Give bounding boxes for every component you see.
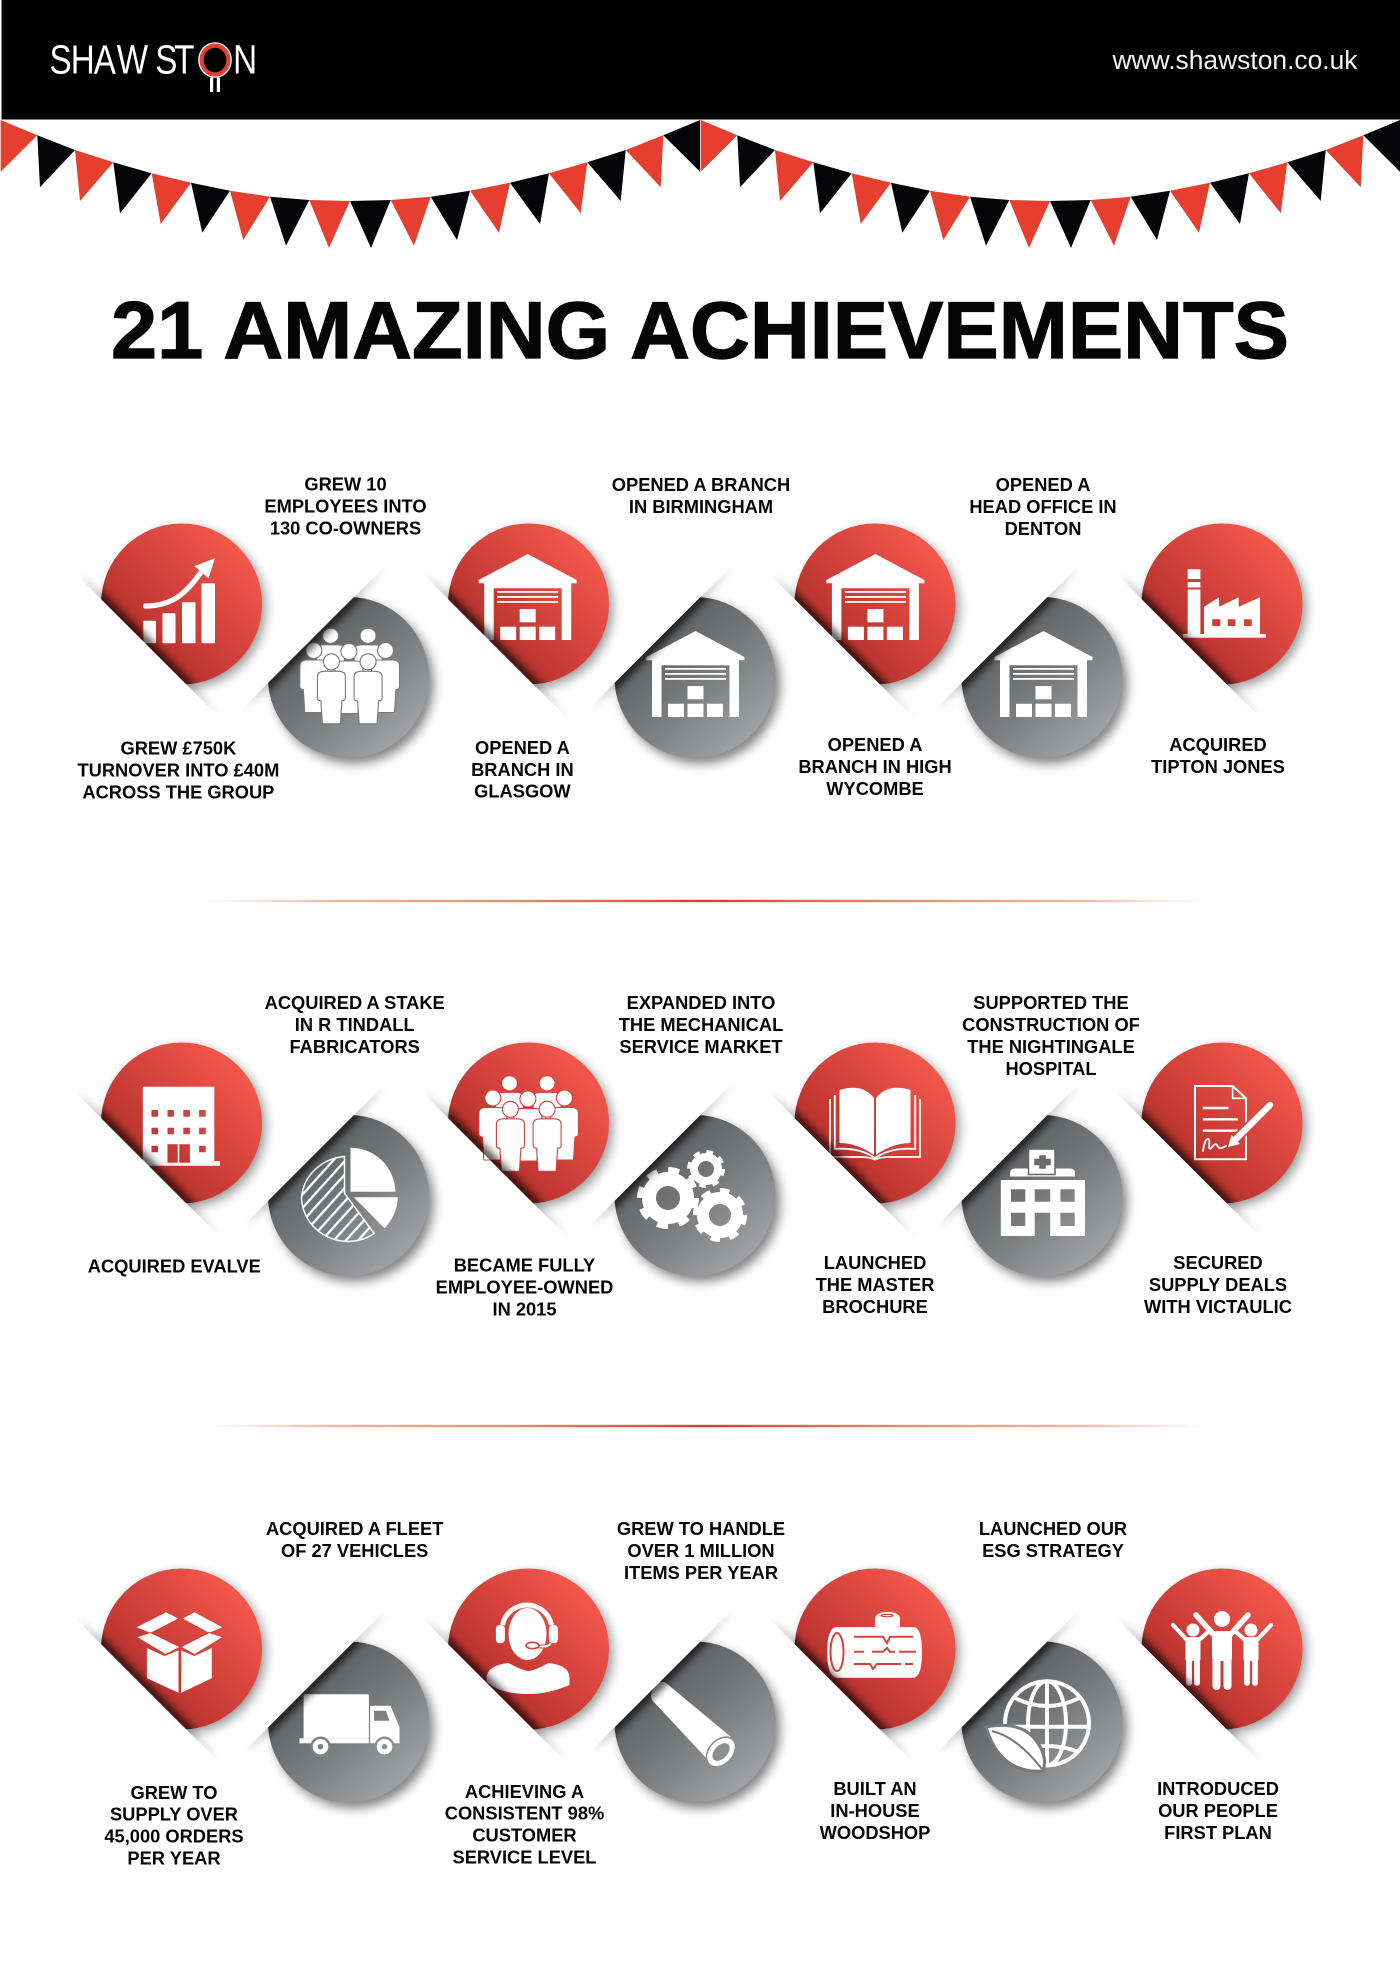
badge: Victaulic supply deals: [1117, 1042, 1306, 1236]
label: R Tindall: IN R TINDALL: [295, 1014, 415, 1035]
label: Nightingale: THE NIGHTINGALE: [967, 1036, 1135, 1057]
badge: employees to co-owners: [244, 564, 434, 764]
badge: customer service: [424, 1568, 612, 1762]
icon: headset operator: [486, 1605, 570, 1694]
label: employee-owned: BECAME FULLY: [454, 1255, 595, 1276]
label: employees to co-owners: GREW 10: [304, 474, 387, 495]
label: 45,000 orders: PER YEAR: [127, 1848, 221, 1869]
label: mechanical service: SERVICE MARKET: [619, 1036, 783, 1057]
label: Denton: DENTON: [1005, 518, 1081, 539]
icon: pipe: [651, 1682, 741, 1773]
icon: office building: [143, 1087, 220, 1166]
icon: group of people: [300, 628, 400, 724]
label: master brochure: BROCHURE: [822, 1296, 928, 1317]
badge: in-house woodshop: [770, 1568, 959, 1762]
panel: row 3: [76, 1518, 1306, 1869]
label: Victaulic: SECURED: [1173, 1252, 1263, 1273]
label: one million items: OVER 1 MILLION: [627, 1540, 775, 1561]
label: Nightingale: HOSPITAL: [1005, 1058, 1097, 1079]
label: customer service: CONSISTENT 98%: [445, 1803, 604, 1824]
badge: mechanical service market: [590, 1082, 780, 1282]
label: ESG strategy: LAUNCHED OUR: [979, 1518, 1127, 1539]
label: High Wycombe: BRANCH IN HIGH: [798, 756, 952, 777]
label: mechanical service: THE MECHANICAL: [619, 1014, 783, 1035]
icon: group of people: [479, 1076, 578, 1171]
badge: employee-owned: [424, 1042, 612, 1236]
badge: one million items: [590, 1609, 780, 1808]
badge: People First plan: [1117, 1568, 1306, 1762]
badge: turnover growth: [76, 524, 266, 718]
icon: warehouse: [646, 631, 744, 717]
icon: rising bar chart: [143, 558, 215, 643]
label: vehicle fleet: OF 27 VEHICLES: [281, 1540, 428, 1561]
badge: Evalve: [76, 1042, 266, 1236]
label: woodshop: IN-HOUSE: [830, 1800, 920, 1821]
icon: signed contract: [1195, 1086, 1271, 1159]
label: High Wycombe: OPENED A: [828, 734, 922, 755]
label: woodshop: BUILT AN: [833, 1778, 917, 1799]
icon: warehouse: [994, 631, 1092, 717]
label: woodshop: WOODSHOP: [820, 1822, 930, 1843]
label: People First: FIRST PLAN: [1164, 1822, 1272, 1843]
label: mechanical service: EXPANDED INTO: [627, 992, 775, 1013]
badge: Nightingale hospital: [937, 1082, 1127, 1282]
label: master brochure: LAUNCHED: [824, 1252, 926, 1273]
label: turnover growth: GREW £750K: [120, 738, 237, 759]
badge: Glasgow branch: [424, 524, 612, 718]
label: vehicle fleet: ACQUIRED A FLEET: [266, 1518, 443, 1539]
logo: Shawston: SHAWSTON: [50, 36, 257, 82]
label: employees to co-owners: EMPLOYEES INTO: [264, 496, 427, 517]
label: Birmingham: IN BIRMINGHAM: [629, 496, 773, 517]
label: employees to co-owners: 130 CO-OWNERS: [270, 518, 421, 539]
label: Birmingham: OPENED A BRANCH: [612, 474, 790, 495]
label: one million items: ITEMS PER YEAR: [624, 1562, 778, 1583]
badge: Denton head office: [937, 564, 1127, 764]
badge: Birmingham branch: [590, 564, 780, 764]
bunting: [1, 120, 1400, 248]
label: Evalve: ACQUIRED EVALVE: [88, 1256, 261, 1277]
website address: www.shawston.co.uk: [1111, 45, 1358, 75]
icon: gears: [640, 1152, 744, 1239]
label: Glasgow: BRANCH IN: [471, 759, 574, 780]
icon: open box: [136, 1612, 224, 1693]
icon: celebrating people: [1173, 1611, 1271, 1686]
badge: master brochure: [770, 1042, 959, 1236]
icon: pie chart: [302, 1148, 398, 1242]
label: customer service: ACHIEVING A: [465, 1781, 584, 1802]
icon: warehouse: [826, 554, 924, 640]
icon: warehouse: [479, 554, 577, 640]
label: 45,000 orders: 45,000 ORDERS: [104, 1826, 244, 1847]
label: Glasgow: GLASGOW: [474, 781, 571, 802]
header band: [2, 0, 1400, 120]
label: employee-owned: EMPLOYEE-OWNED: [436, 1277, 613, 1298]
label: Nightingale: CONSTRUCTION OF: [962, 1014, 1140, 1035]
label: Nightingale: SUPPORTED THE: [973, 992, 1129, 1013]
label: master brochure: THE MASTER: [816, 1274, 934, 1295]
icon: globe and leaf: [986, 1681, 1089, 1771]
label: Victaulic: SUPPLY DEALS: [1149, 1274, 1287, 1295]
title: 21 AMAZING ACHIEVEMENTS: [111, 286, 1289, 376]
label: one million items: GREW TO HANDLE: [617, 1518, 785, 1539]
label: turnover growth: TURNOVER INTO £40M: [77, 760, 279, 781]
icon: log: [827, 1612, 922, 1678]
label: employee-owned: IN 2015: [492, 1299, 557, 1320]
badge: 45,000 orders: [76, 1568, 266, 1762]
label: R Tindall: FABRICATORS: [290, 1036, 420, 1057]
badge: Tipton Jones: [1117, 524, 1306, 718]
label: People First: OUR PEOPLE: [1158, 1800, 1278, 1821]
label: Tipton Jones: ACQUIRED: [1169, 734, 1267, 755]
label: ESG strategy: ESG STRATEGY: [982, 1540, 1124, 1561]
label: Denton: OPENED A: [996, 474, 1090, 495]
badge: vehicle fleet: [244, 1609, 434, 1808]
label: People First: INTRODUCED: [1157, 1778, 1279, 1799]
badge: R Tindall stake: [244, 1082, 434, 1282]
icon: hospital: [1001, 1149, 1085, 1236]
label: Glasgow: OPENED A: [475, 737, 570, 758]
label: customer service: SERVICE LEVEL: [453, 1847, 596, 1868]
badge: ESG strategy: [937, 1609, 1127, 1808]
label: customer service: CUSTOMER: [472, 1825, 577, 1846]
label: Tipton Jones: TIPTON JONES: [1151, 756, 1285, 777]
label: 45,000 orders: GREW TO: [130, 1782, 218, 1803]
label: Victaulic: WITH VICTAULIC: [1144, 1296, 1292, 1317]
label: Denton: HEAD OFFICE IN: [969, 496, 1117, 517]
panel: row 1: [76, 474, 1306, 803]
icon: factory: [1183, 569, 1266, 638]
panel: row 2: [76, 992, 1306, 1320]
icon: open book: [830, 1088, 920, 1160]
label: R Tindall: ACQUIRED A STAKE: [265, 992, 445, 1013]
label: 45,000 orders: SUPPLY OVER: [110, 1804, 238, 1825]
badge: High Wycombe branch: [770, 524, 959, 718]
label: High Wycombe: WYCOMBE: [826, 778, 924, 799]
label: turnover growth: ACROSS THE GROUP: [82, 782, 274, 803]
icon: delivery truck: [300, 1694, 400, 1756]
